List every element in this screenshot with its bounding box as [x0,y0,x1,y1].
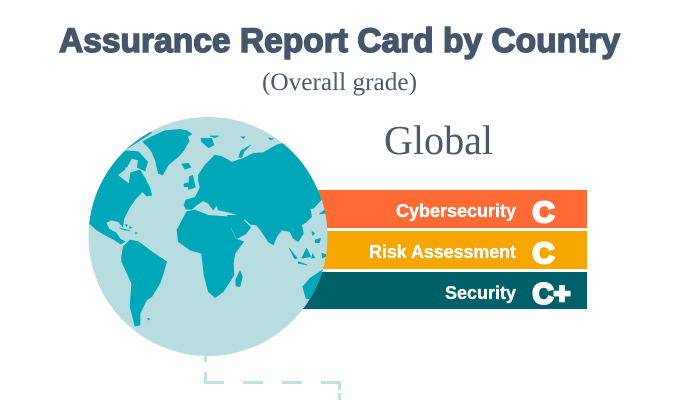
Eurasia [184,143,323,245]
Africa [177,210,244,298]
bar: Security grade C+ [290,272,587,310]
dashed connector [206,356,340,400]
bar: Cybersecurity grade C [300,190,587,229]
globe [88,117,328,356]
bar: Risk Assessment grade C: Risk Assessment [369,242,516,262]
bar: Cybersecurity grade C: C [532,197,555,229]
title: Assurance Report Card by Country [59,22,620,60]
Greenland [143,129,192,175]
subtitle: (Overall grade) [262,69,417,96]
Southeast Asia and Japan islands [289,209,328,265]
Iceland [182,163,191,169]
bar: Security grade C+: C+ [532,278,570,310]
Novaya Zemlya and small Arctic islands [239,137,273,157]
North America [89,152,152,244]
South America [122,240,167,326]
Falkland Islands [148,318,150,320]
Arabian Peninsula [227,215,251,239]
bar: Risk Assessment grade C: C [532,238,555,270]
Arctic islands [123,132,152,172]
infographic canvas [58,26,621,400]
Madagascar [236,271,242,287]
Australia [302,269,323,300]
Caribbean islands [119,225,137,234]
United Kingdom and Ireland [184,175,195,189]
bar: Security grade C+: Security [445,283,516,303]
heading: Global: Global [384,117,493,163]
Svalbard [201,136,219,148]
bar: Risk Assessment grade C [300,231,587,270]
bar: Cybersecurity grade C: Cybersecurity [396,201,516,221]
